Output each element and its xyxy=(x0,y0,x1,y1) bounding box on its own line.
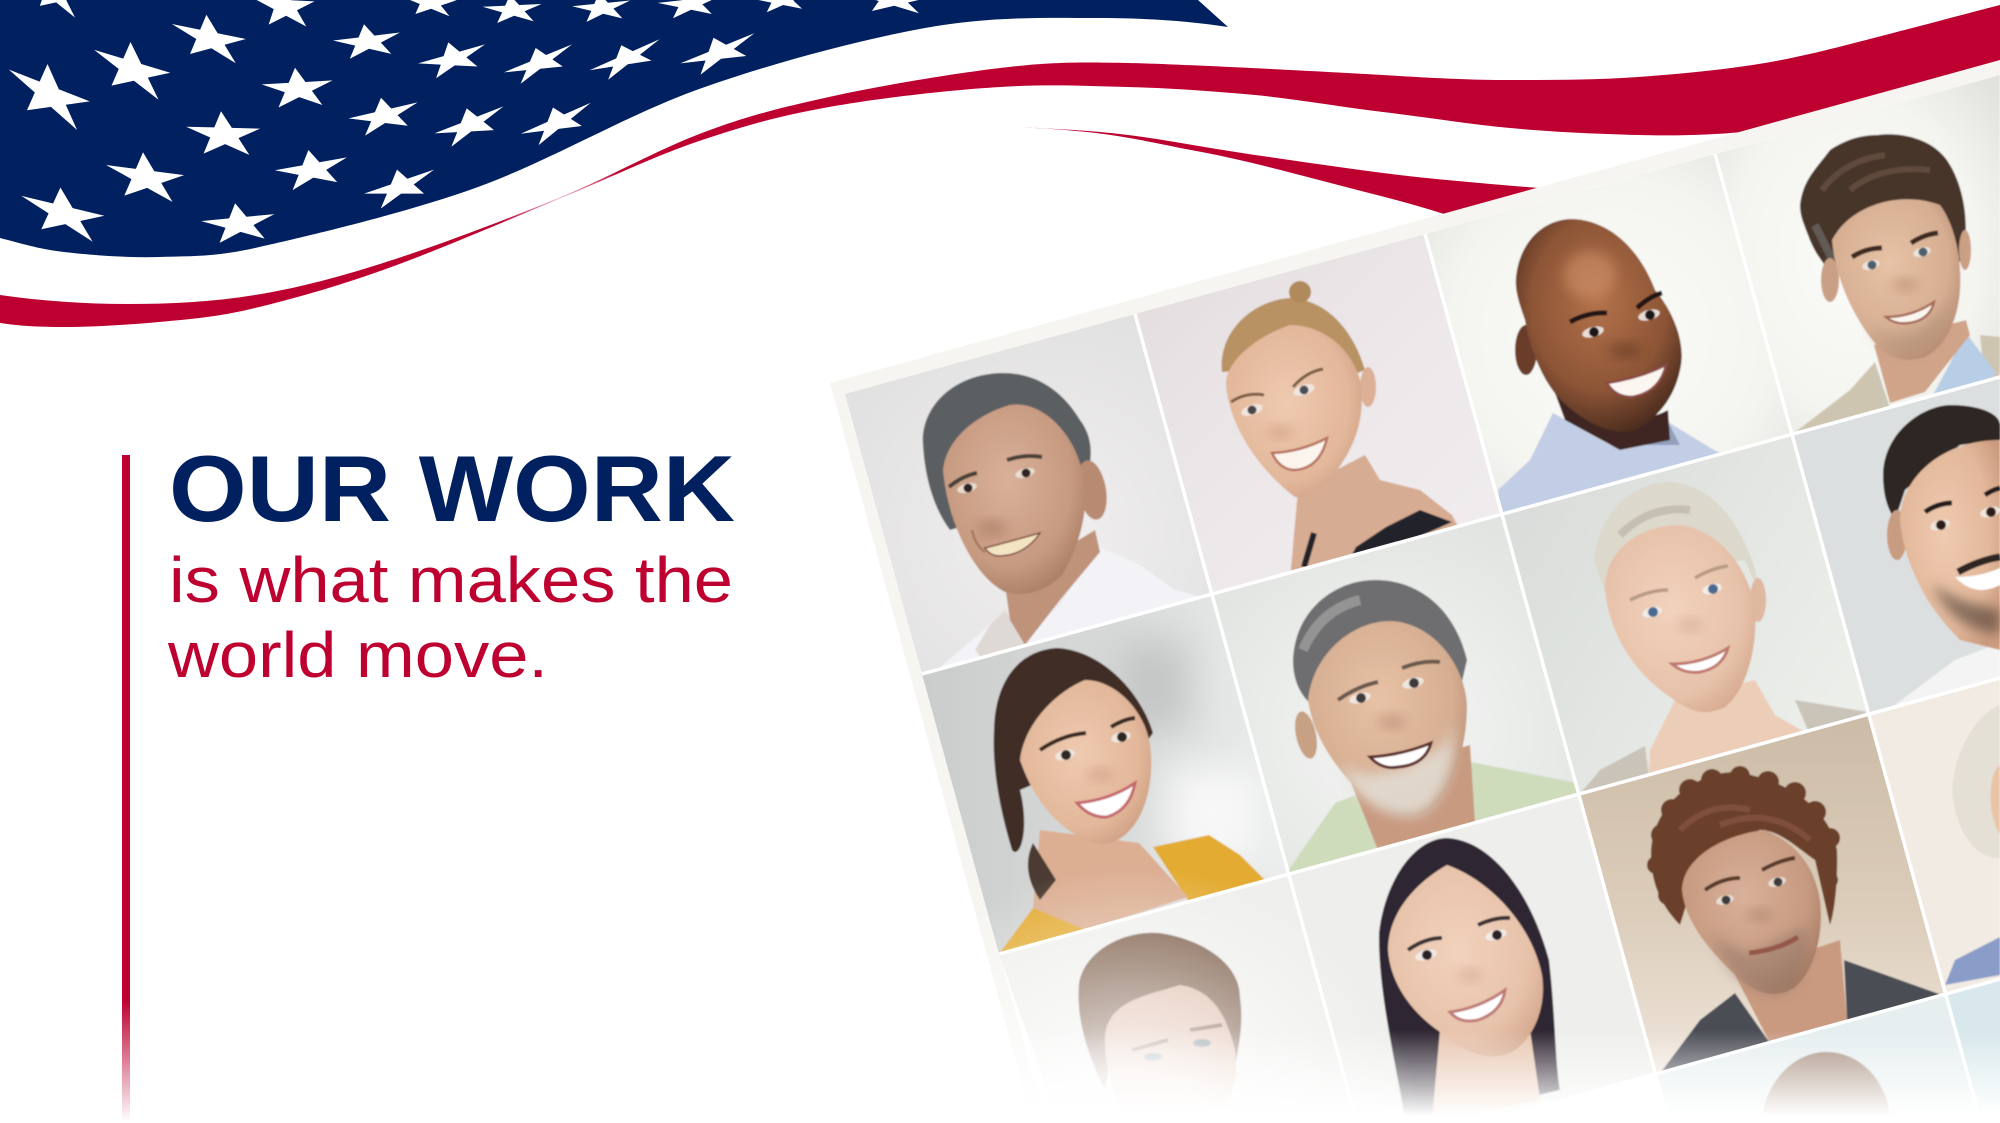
stars xyxy=(7,0,933,245)
photo: young man with tousled hair xyxy=(1000,876,1339,1092)
subheading line 1: is what makes the xyxy=(169,544,733,616)
photo: woman with white hair, cropped xyxy=(1871,680,2000,992)
panel: tilted photo grid xyxy=(800,60,2000,1123)
photo: woman with long black hair xyxy=(1285,790,1665,1123)
subheading line 2: world move. xyxy=(167,619,548,691)
flag: short red stripe xyxy=(1016,127,1539,214)
photo: grey-bearded man in green xyxy=(1205,510,1585,880)
photo: faded head, bottom row xyxy=(1658,996,1970,1110)
title block xyxy=(167,436,735,691)
photo: smiling bald man xyxy=(1420,150,1800,520)
photo grid base xyxy=(845,75,2000,1123)
photo: blonde woman xyxy=(1130,230,1510,600)
photo: man with dark hair and moustache xyxy=(1794,379,2000,712)
fade overlay: lower left xyxy=(800,860,1460,1123)
heading: OUR WORK xyxy=(169,436,735,541)
flag: long red stripe xyxy=(0,5,2000,327)
accent bar xyxy=(122,455,130,1123)
flag: navy star field xyxy=(0,0,1228,257)
fade overlay: bottom xyxy=(800,980,2000,1123)
photo: older man with grey hair xyxy=(840,310,1220,680)
photo: man with curly hair xyxy=(1575,710,1955,1080)
photo frame xyxy=(830,60,2000,1123)
photo: woman with dark hair and yellow top xyxy=(915,590,1295,960)
photo: pale blue cell, bottom row xyxy=(1946,979,2000,1123)
photo: older woman with short pale hair xyxy=(1495,430,1875,800)
photo: man with brown hair and blue shirt xyxy=(1710,70,2000,440)
